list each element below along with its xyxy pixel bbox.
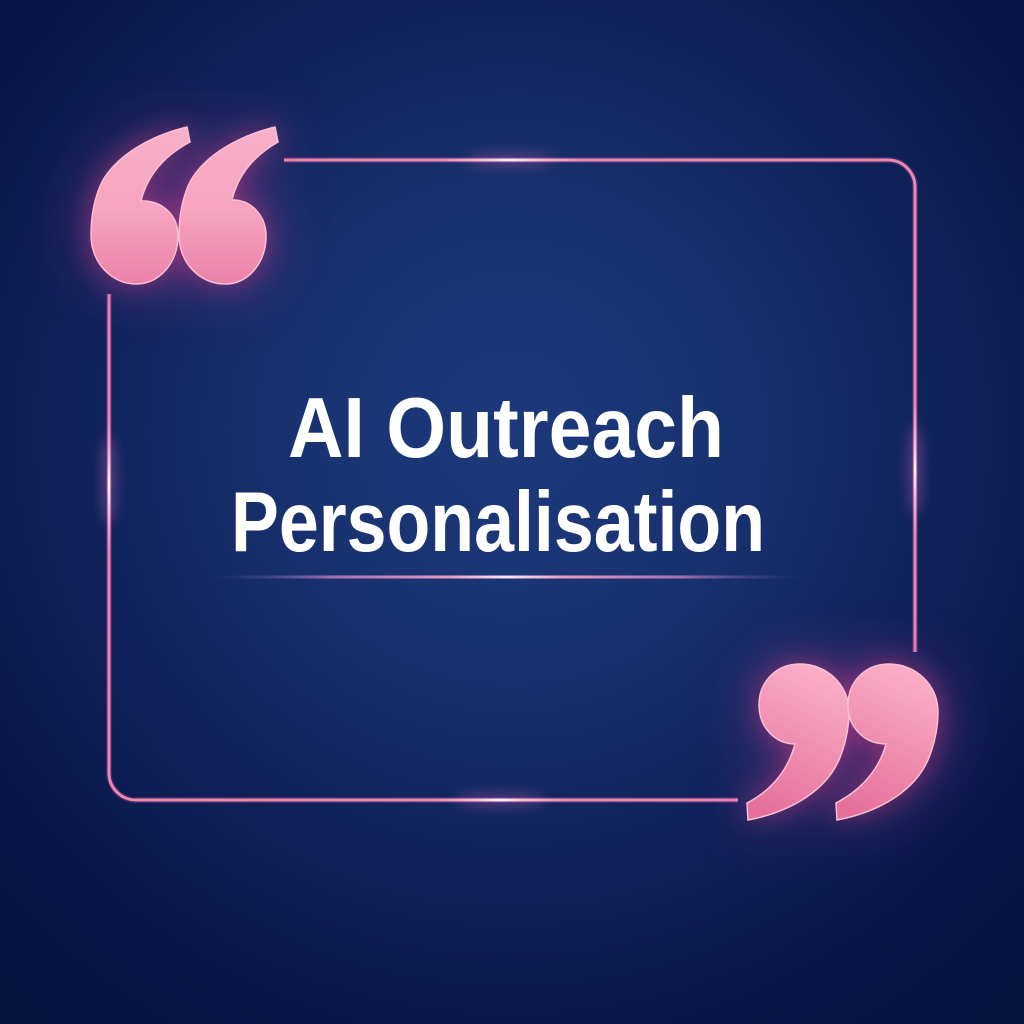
title <box>231 381 765 570</box>
title: AI Outreach <box>288 381 724 476</box>
title: Personalisation <box>231 475 765 570</box>
panel: rounded frame <box>102 153 922 807</box>
icon: closing quotation mark <box>747 664 938 820</box>
divider under title <box>215 576 800 578</box>
icon: opening quotation mark <box>91 127 278 284</box>
